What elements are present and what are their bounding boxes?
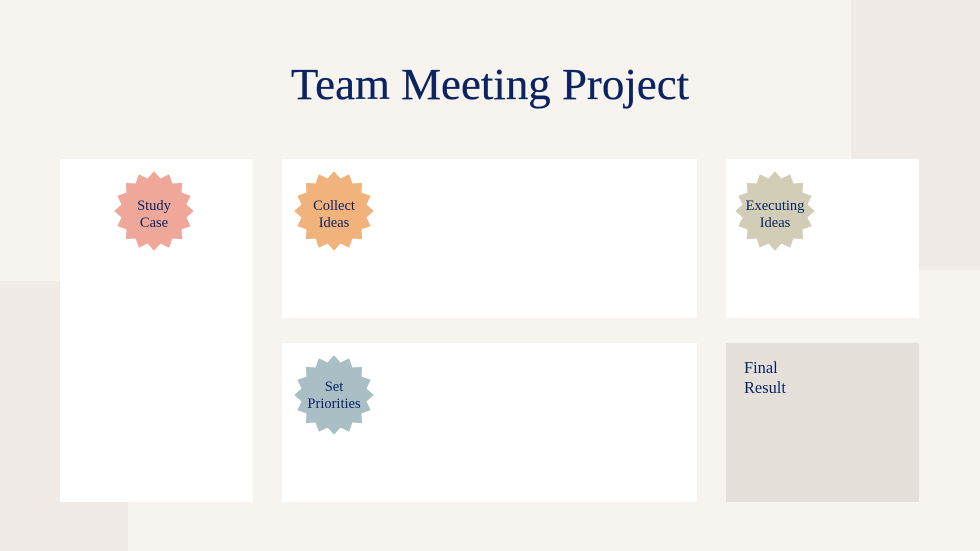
badge: collect ideas: Collect	[313, 198, 355, 214]
panel: final result	[726, 343, 919, 502]
badge: set priorities	[295, 356, 373, 434]
badge: collect ideas	[295, 172, 373, 250]
badge: study case: Study	[137, 198, 172, 214]
text: final result: Final	[744, 358, 778, 377]
panel: executing ideas	[726, 159, 919, 318]
panel: study case	[60, 159, 253, 502]
panel: set priorities	[282, 343, 697, 502]
text: final result: Result	[744, 378, 786, 397]
text: final result	[744, 358, 786, 397]
title: Team Meeting Project	[291, 59, 690, 109]
panel: collect ideas	[282, 159, 697, 318]
badge: set priorities: Set	[325, 379, 343, 395]
badge: study case: Case	[140, 215, 168, 231]
badge: executing ideas: Ideas	[760, 215, 791, 231]
badge: collect ideas: Ideas	[319, 215, 350, 231]
badge: study case	[115, 172, 193, 250]
badge: executing ideas: Executing	[746, 198, 804, 214]
badge: set priorities: Priorities	[307, 396, 361, 412]
badge: executing ideas	[736, 172, 814, 250]
